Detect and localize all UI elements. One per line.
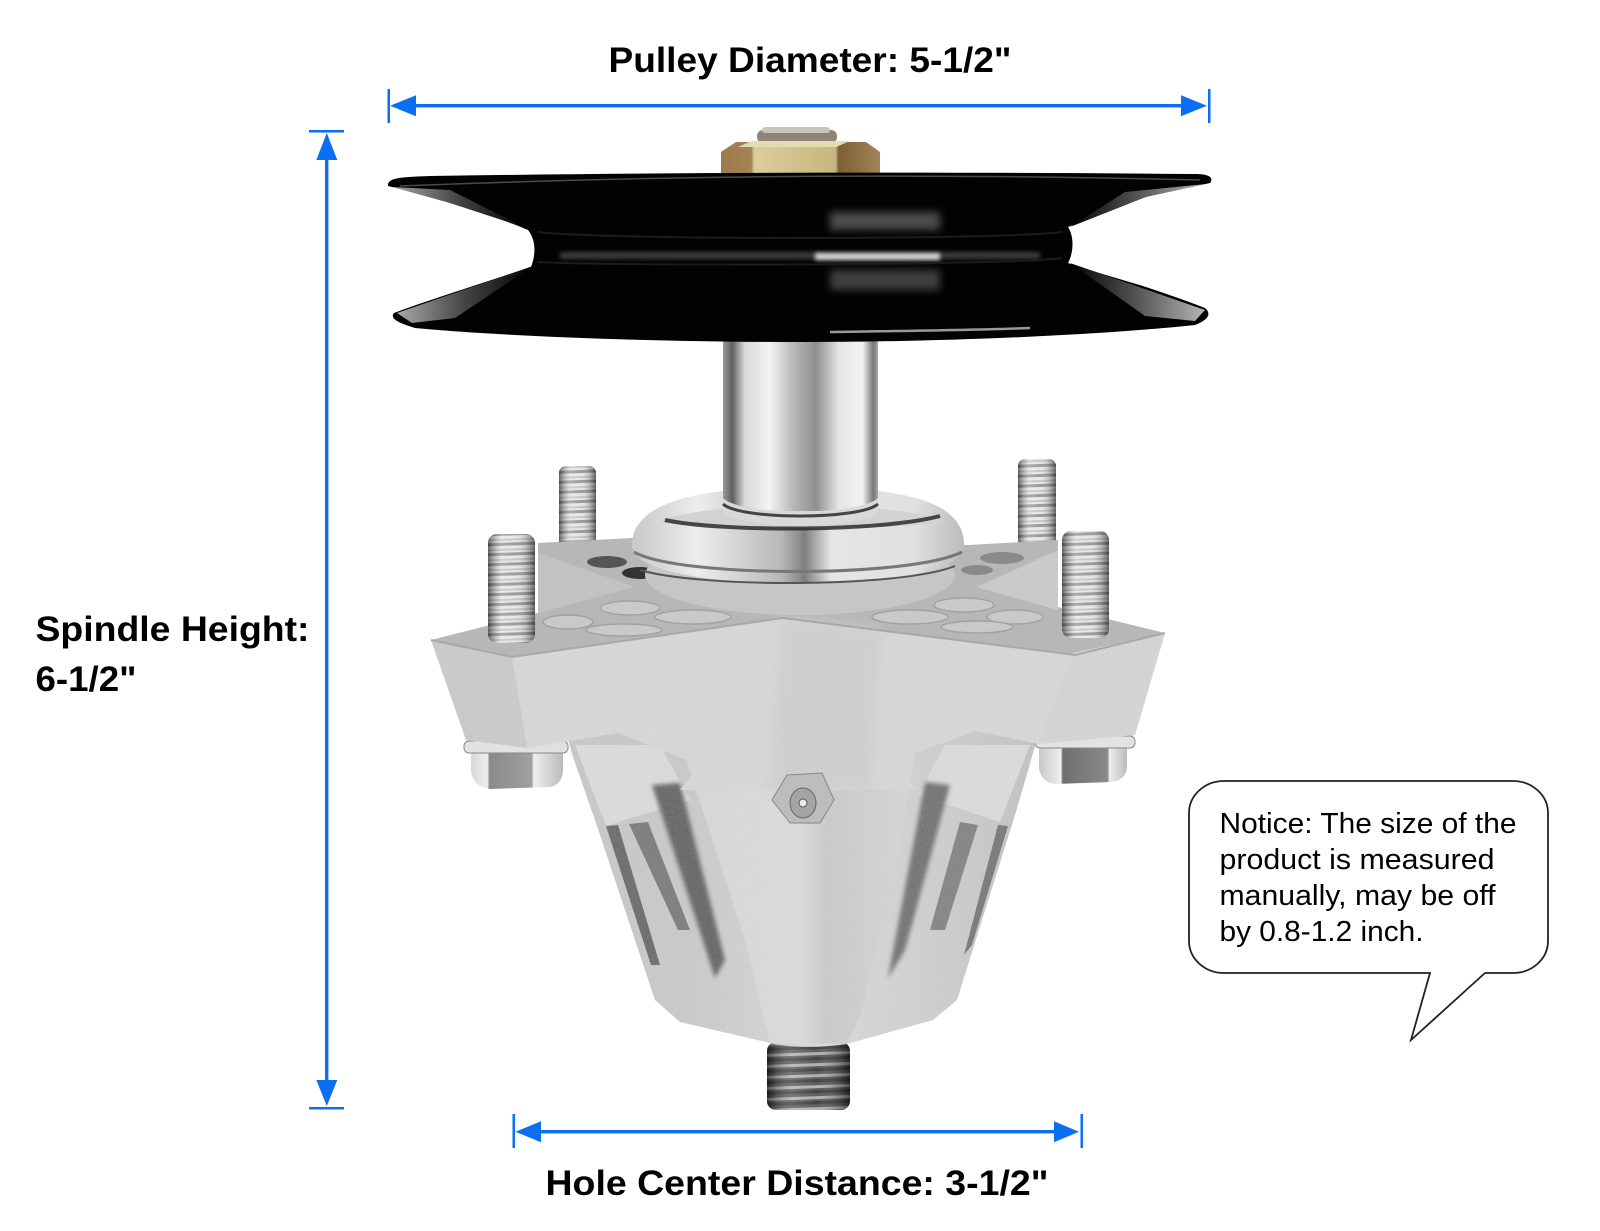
left rib slots: [606, 783, 725, 978]
notice text: by 0.8-1.2 inch.: [1220, 916, 1424, 948]
icon: spindle assembly photo: [388, 127, 1211, 1110]
heading: hole center distance: Hole Center Distance: 3-1/2": [546, 1164, 1048, 1203]
back right stud: [1018, 459, 1056, 547]
right flange nut: [1035, 736, 1135, 784]
housing top plate: [431, 538, 1165, 657]
hex nut: [721, 141, 880, 173]
casting neck: [645, 535, 955, 615]
v-belt pulley: [388, 173, 1211, 342]
shaft: [723, 335, 878, 526]
front right stud: [1062, 531, 1109, 638]
heading: spindle height: 6-1/2": [36, 660, 136, 699]
grease fitting: [772, 773, 834, 823]
bottom threaded end: [767, 1042, 850, 1110]
speech bubble: [1189, 781, 1548, 1040]
casting grain texture: [431, 618, 1165, 1044]
arrow: spindle height dimension: [309, 130, 344, 1110]
right rib slots: [888, 782, 1008, 978]
pulley lower-left sheen: [397, 266, 533, 323]
right strut: [918, 745, 1030, 822]
notice text: manually, may be off: [1220, 880, 1496, 912]
left strut: [575, 745, 690, 826]
arrow: pulley diameter dimension: [388, 89, 1210, 123]
pulley upper-right sheen: [1070, 184, 1206, 227]
left flange nut: [464, 741, 568, 789]
pulley groove highlights: [538, 212, 1062, 290]
callout: measurement notice: [1189, 781, 1548, 1040]
back left stud: [559, 466, 596, 550]
top-surface bolt pockets: [543, 598, 1043, 636]
pulley upper-left sheen: [392, 187, 526, 228]
pulley lower-right sheen: [1070, 263, 1205, 321]
housing front flange: [431, 598, 1165, 790]
heading: pulley diameter: Pulley Diameter: 5-1/2": [608, 41, 1012, 80]
heading: spindle height: Spindle Height:: [36, 610, 310, 649]
cone body: [565, 728, 1040, 1047]
arrow: hole center distance dimension: [512, 1114, 1083, 1148]
bearing cap: [632, 487, 964, 583]
top bolt: [757, 127, 837, 143]
centre wedge face: [680, 740, 917, 1044]
notice text: product is measured: [1220, 844, 1494, 876]
front left stud: [488, 534, 535, 643]
notice text: Notice: The size of the: [1220, 808, 1516, 840]
